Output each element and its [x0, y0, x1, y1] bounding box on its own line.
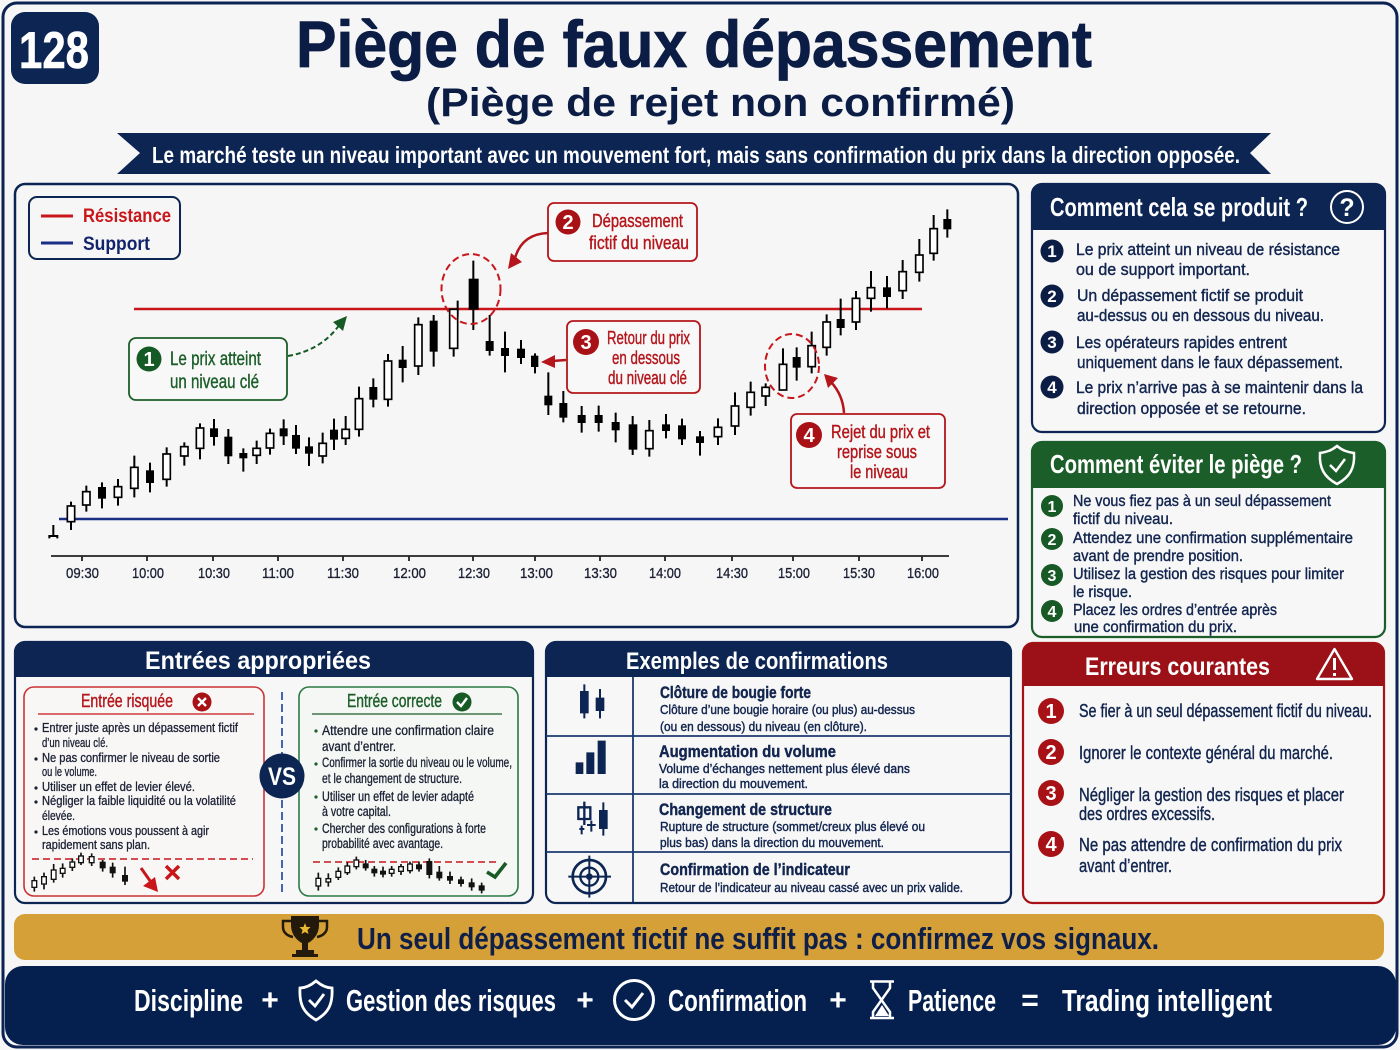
formula footer bar: Trading intelligent	[1062, 983, 1272, 1018]
callout 3: Retour du prix	[607, 328, 690, 348]
confirmation rows: Augmentation du volume	[659, 743, 836, 761]
panel: comment cela se produit	[1032, 184, 1385, 432]
confirmation rows: plus bas) dans la direction du mouvement.	[660, 836, 884, 850]
callout 4: le niveau	[850, 462, 908, 482]
candlesticks left half	[49, 261, 509, 538]
arrow: callout 4	[824, 374, 844, 413]
icon: question mark: ?	[1339, 194, 1355, 222]
risky entry card: Entrée risquée	[81, 691, 173, 711]
formula footer bar: Gestion des risques	[346, 983, 556, 1018]
callout 1: Le prix atteint	[170, 349, 262, 370]
correct entry card: Entrée correcte	[347, 691, 442, 711]
confirmation rows: Volume d’échanges nettement plus élevé dans	[659, 762, 910, 776]
legend	[29, 197, 180, 259]
steps list: 4	[1047, 378, 1057, 397]
correct entry bullets: avant d’entrer.	[322, 739, 396, 754]
formula footer bar: =	[1021, 984, 1039, 1017]
steps list: Le prix atteint un niveau de résistance	[1076, 240, 1340, 259]
callout 1: un niveau clé	[170, 372, 259, 393]
number badge: 128	[19, 22, 89, 80]
icon: green check mark	[487, 863, 506, 877]
panel: exemples de confirmations: Exemples de confirmations	[626, 648, 888, 675]
risky entry bullets: ou le volume.	[42, 764, 97, 779]
confirmation rows: (ou en dessous) du niveau (en clôture).	[660, 720, 867, 734]
steps list: 3	[1047, 333, 1057, 352]
icon: shield	[300, 981, 332, 1020]
time axis: 10:30	[198, 565, 230, 582]
steps list: Les opérateurs rapides entrent	[1076, 333, 1287, 352]
prevention list: Ne vous fiez pas à un seul dépassement	[1073, 493, 1331, 510]
icon: candles	[580, 684, 604, 718]
mini chart: correct	[316, 857, 485, 893]
callout 3: en dessous	[612, 348, 680, 368]
arrow: callout 3	[541, 355, 566, 368]
callout 1	[129, 338, 287, 400]
mistakes list: Ne pas attendre de confirmation du prix	[1079, 835, 1342, 855]
time axis	[51, 556, 949, 582]
formula footer bar: +	[261, 984, 279, 1017]
callout 2: fictif du niveau	[589, 233, 689, 253]
prevention list: le risque.	[1073, 584, 1132, 601]
mistakes list: 2	[1045, 742, 1057, 764]
confirmation rows	[659, 684, 963, 895]
correct entry bullets: à votre capital.	[322, 804, 391, 819]
prevention list: fictif du niveau.	[1073, 511, 1173, 528]
steps list: direction opposée et se retourne.	[1077, 399, 1306, 418]
correct entry bullets	[316, 723, 512, 851]
confirmation rows: Clôture d’une bougie horaire (ou plus) au-dessus	[660, 703, 915, 717]
correct entry bullets: Utiliser un effet de levier adapté	[322, 789, 474, 804]
mistakes list: 4	[1045, 834, 1057, 856]
risky entry bullets: rapidement sans plan.	[42, 837, 150, 852]
steps list: Un dépassement fictif se produit	[1077, 286, 1303, 305]
gold takeaway banner	[14, 914, 1384, 960]
icon: check circle	[614, 980, 654, 1020]
correct entry bullets: Attendre une confirmation claire	[322, 723, 494, 738]
resistance line	[134, 308, 922, 310]
formula footer bar	[5, 966, 1396, 1045]
callout 4: reprise sous	[837, 442, 917, 462]
correct entry bullets: probabilité avec avantage.	[322, 836, 443, 851]
correct entry bullets: Confirmer la sortie du niveau ou le volume,	[322, 755, 512, 770]
icon: structure	[578, 802, 608, 836]
legend: Résistance	[83, 206, 171, 227]
confirmation rows: la direction du mouvement.	[659, 777, 808, 791]
icon: trophy	[283, 916, 327, 957]
candlesticks right half	[517, 209, 951, 457]
support line	[59, 518, 1008, 520]
icon: volume bars	[576, 741, 606, 774]
correct entry bullets: Chercher des configurations à forte	[322, 821, 486, 836]
time axis: 11:30	[327, 565, 359, 582]
mistakes list: Ignorer le contexte général du marché.	[1079, 743, 1333, 763]
callout 1: 1	[143, 349, 155, 371]
prevention list: 2	[1048, 532, 1057, 549]
callout 4: Rejet du prix et	[831, 422, 930, 442]
mistakes list: 3	[1045, 783, 1057, 805]
steps list: ou de support important.	[1076, 260, 1250, 279]
dashed circle: rejection	[765, 334, 819, 398]
risky entry bullets: d’un niveau clé.	[42, 735, 108, 750]
icon: check	[452, 692, 472, 712]
formula footer bar: Confirmation	[668, 983, 807, 1018]
prevention list: Utilisez la gestion des risques pour limiter	[1073, 566, 1345, 583]
icon: target	[568, 856, 611, 898]
mistakes list: Négliger la gestion des risques et placer	[1079, 785, 1344, 805]
formula footer bar: +	[829, 984, 847, 1017]
gold takeaway banner: Un seul dépassement fictif ne suffit pas : confirmez vos signaux.	[357, 921, 1159, 956]
mistakes list: avant d’entrer.	[1079, 856, 1172, 876]
mistakes list	[1038, 698, 1372, 876]
steps list: 1	[1047, 242, 1057, 261]
icon: cross	[192, 692, 212, 712]
steps list: 2	[1047, 287, 1057, 306]
arrow: callout 1	[288, 316, 347, 356]
steps list: au-dessus ou en dessous du niveau.	[1077, 306, 1324, 325]
mistakes list: des ordres excessifs.	[1079, 804, 1215, 824]
panel: comment éviter le piège	[1032, 442, 1385, 637]
prevention list: 1	[1048, 499, 1057, 516]
title: Piège de faux dépassement	[296, 7, 1092, 81]
risky entry bullets: Négliger la faible liquidité ou la volatilité	[42, 793, 236, 808]
icon: hourglass	[870, 982, 894, 1018]
confirmation rows: Rupture de structure (sommet/creux plus élevé ou	[660, 820, 925, 834]
number badge	[11, 12, 99, 84]
panel: exemples de confirmations	[546, 642, 1011, 903]
subtitle: (Piège de rejet non confirmé)	[426, 81, 1015, 125]
callout 4	[791, 414, 945, 488]
ribbon banner	[117, 133, 1271, 174]
confirmation icons	[568, 684, 611, 898]
correct entry bullets: et le changement de structure.	[322, 771, 462, 786]
prevention list: avant de prendre position.	[1073, 548, 1243, 565]
steps list	[1040, 240, 1363, 418]
risky entry bullets: Utiliser un effet de levier élevé.	[42, 779, 195, 794]
formula footer bar: +	[576, 984, 594, 1017]
time axis: 15:30	[843, 565, 875, 582]
correct entry card	[299, 687, 518, 896]
time axis: 11:00	[262, 565, 294, 582]
prevention list: 3	[1048, 568, 1057, 585]
panel: comment cela se produit: Comment cela se produit ?	[1050, 192, 1308, 222]
dashed circle: false breakout	[442, 254, 500, 324]
panel: entrées appropriées: Entrées appropriées	[145, 647, 371, 675]
time axis: 10:00	[132, 565, 164, 582]
confirmation rows: Clôture de bougie forte	[660, 684, 811, 702]
time axis: 15:00	[778, 565, 810, 582]
icon: warning triangle	[1317, 649, 1352, 679]
time axis: 12:00	[393, 565, 426, 582]
risky entry bullets: Ne pas confirmer le niveau de sortie	[42, 750, 220, 765]
prevention list	[1041, 493, 1353, 636]
confirmation rows: Changement de structure	[659, 801, 832, 819]
risky entry card	[24, 687, 264, 896]
mini chart: risky	[32, 853, 128, 892]
callout 3: du niveau clé	[608, 368, 687, 388]
time axis: 12:30	[458, 565, 490, 582]
legend: Support	[83, 234, 151, 255]
icon: question mark	[1331, 191, 1363, 223]
formula footer bar: Patience	[908, 983, 996, 1018]
risky entry bullets	[36, 720, 238, 852]
vs divider	[260, 692, 304, 893]
panel: comment éviter le piège: Comment éviter le piège ?	[1050, 449, 1302, 479]
prevention list: Attendez une confirmation supplémentaire	[1073, 530, 1353, 547]
prevention list: une confirmation du prix.	[1074, 619, 1237, 636]
time axis: 13:00	[520, 565, 553, 582]
icon: shield check	[1320, 446, 1354, 484]
confirmation rows: Retour de l’indicateur au niveau cassé avec un prix valide.	[660, 881, 963, 895]
icon: red cross mark	[166, 866, 179, 879]
icon: red down arrow	[141, 868, 158, 892]
time axis: 16:00	[907, 565, 939, 582]
vs divider: VS	[268, 763, 296, 791]
callout 2: Dépassement	[592, 211, 683, 231]
time axis: 09:30	[66, 565, 99, 582]
callout 2: 2	[562, 212, 574, 234]
panel: price chart	[15, 184, 1018, 627]
risky entry bullets: Entrer juste après un dépassement fictif	[42, 720, 238, 735]
risky entry bullets: élevée.	[42, 808, 75, 823]
prevention list: 4	[1048, 604, 1057, 621]
panel: erreurs courantes: Erreurs courantes	[1085, 653, 1270, 681]
formula footer bar: Discipline	[134, 983, 243, 1018]
prevention list: Placez les ordres d’entrée après	[1073, 602, 1277, 619]
risky entry bullets: Les émotions vous poussent à agir	[42, 823, 210, 838]
arrow: callout 2	[508, 233, 548, 269]
time axis: 14:00	[649, 565, 681, 582]
confirmation rows: Confirmation de l’indicateur	[660, 861, 850, 879]
callout 4: 4	[803, 425, 815, 447]
mistakes list: 1	[1045, 701, 1057, 723]
steps list: uniquement dans le faux dépassement.	[1077, 353, 1343, 372]
callout 3	[567, 321, 700, 393]
panel: erreurs courantes	[1023, 643, 1384, 903]
panel: entrées appropriées	[5, 642, 1396, 1045]
time axis: 13:30	[584, 565, 617, 582]
callout 3: 3	[580, 332, 592, 354]
steps list: Le prix n’arrive pas à se maintenir dans la	[1076, 378, 1363, 397]
time axis: 14:30	[716, 565, 748, 582]
callout 2	[548, 203, 697, 261]
